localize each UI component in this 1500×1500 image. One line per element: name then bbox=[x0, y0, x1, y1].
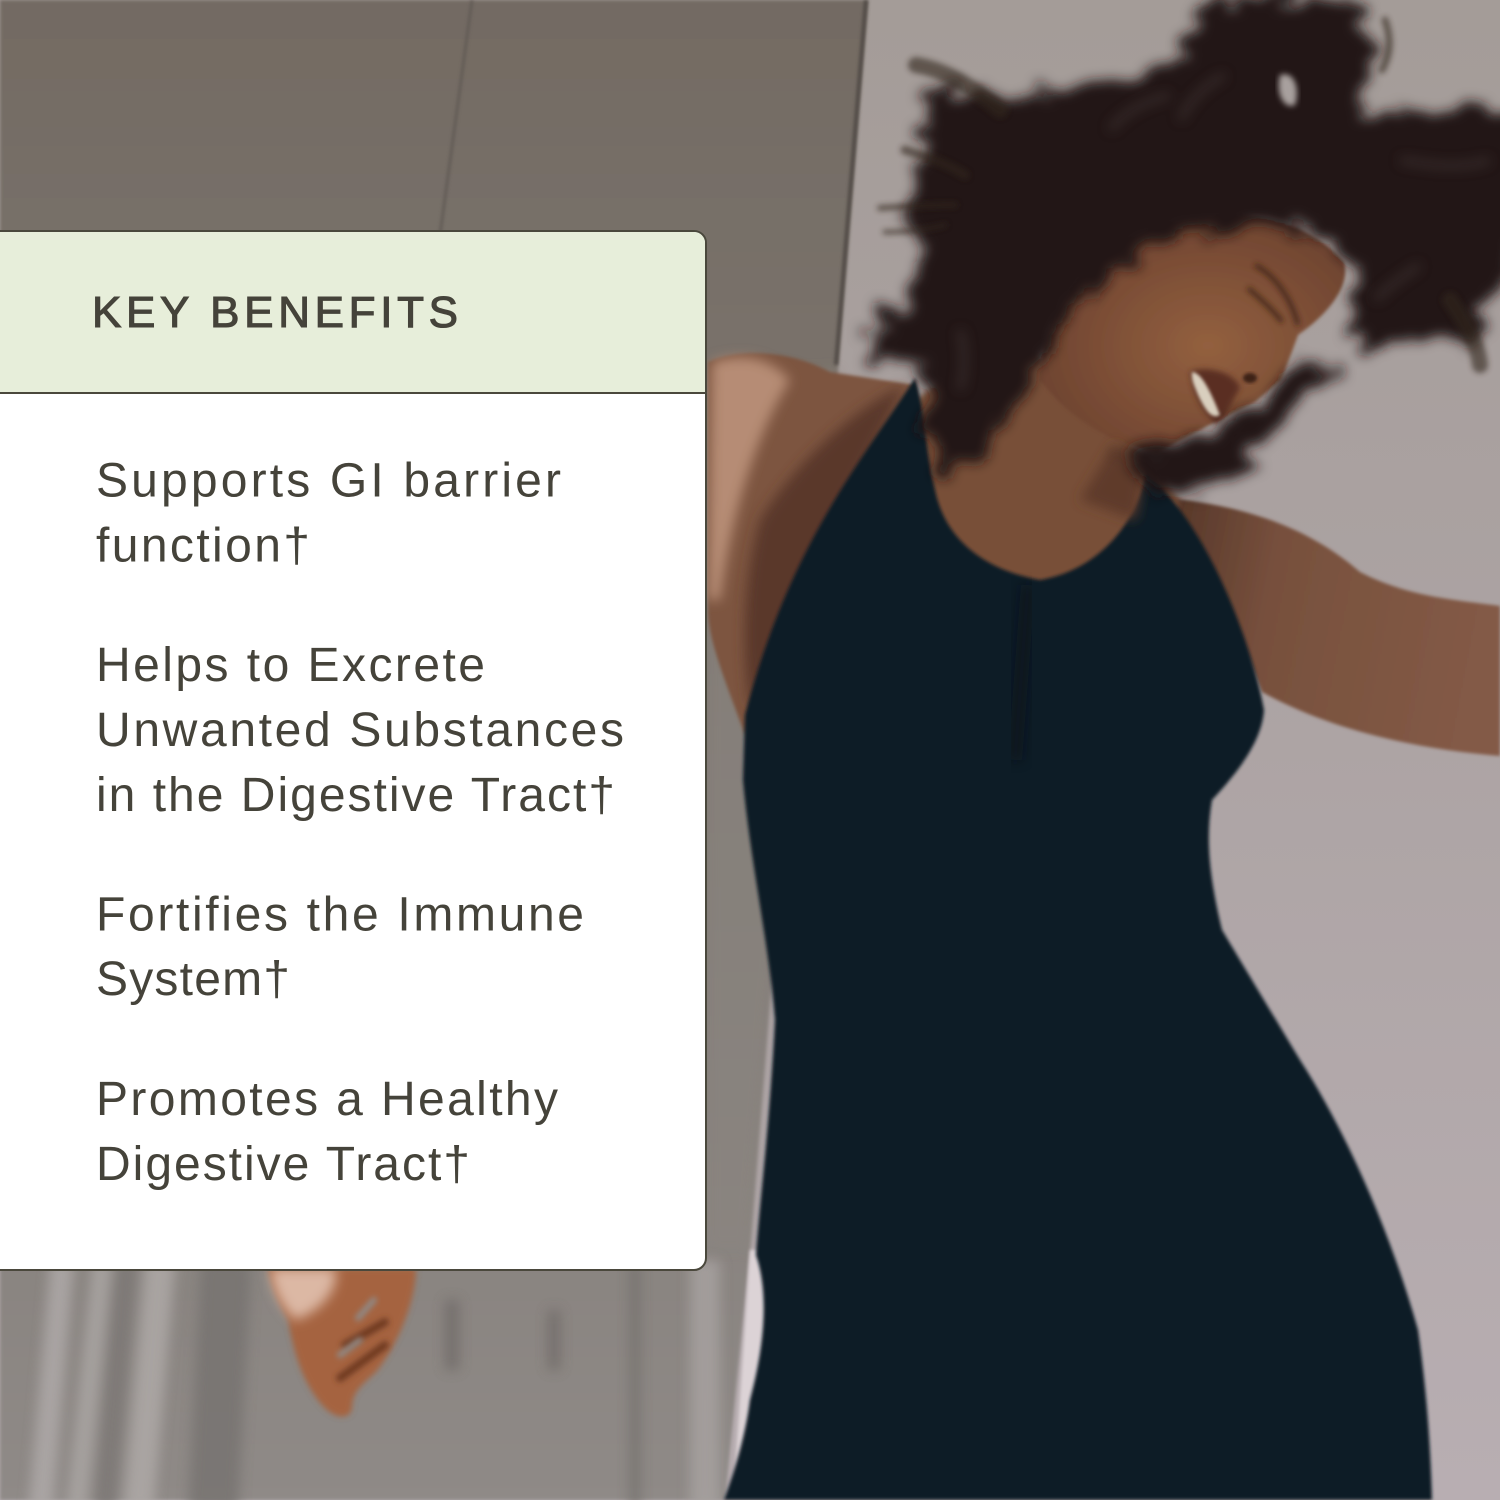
panel: key benefits card bbox=[0, 231, 706, 1270]
wall gap in hair curls bbox=[1279, 74, 1297, 106]
motion streaks below card bbox=[29, 1259, 720, 1500]
benefit 4 text bbox=[96, 1073, 558, 1191]
benefit 1 text: function† bbox=[96, 520, 310, 572]
benefit 3 text: Fortifies the Immune bbox=[96, 888, 584, 942]
pale wall strip beside dress bbox=[735, 1250, 772, 1470]
benefit 2 text: in the Digestive Tract† bbox=[96, 769, 615, 822]
concrete edge band beside card bbox=[706, 370, 838, 1250]
left shoulder and arm bbox=[708, 353, 930, 735]
benefit 1 text bbox=[96, 454, 561, 572]
photo: hand blurred at lower left bbox=[268, 1268, 416, 1417]
flying hair strands bbox=[880, 20, 1480, 365]
card header band bbox=[0, 232, 706, 393]
chest and neck bbox=[915, 330, 1180, 640]
benefit 4 text: Promotes a Healthy bbox=[96, 1073, 558, 1126]
benefit 2 text: Unwanted Substances bbox=[96, 704, 624, 757]
eye and brow bbox=[1248, 265, 1298, 325]
face bbox=[1040, 214, 1345, 453]
nose shadow bbox=[1243, 373, 1257, 383]
benefit 2 text bbox=[96, 639, 624, 822]
benefit 3 text bbox=[96, 888, 584, 1006]
right arm bbox=[1170, 498, 1500, 756]
dress zip shadow bbox=[1015, 585, 1028, 760]
photo: dancing woman bbox=[708, 0, 1500, 1500]
benefit 2 text: Helps to Excrete bbox=[96, 639, 485, 692]
hair highlights bbox=[960, 75, 1490, 390]
dress bbox=[724, 378, 1432, 1500]
smile bbox=[1190, 369, 1240, 424]
hair bbox=[862, 0, 1500, 495]
benefit 3 text: System† bbox=[96, 953, 290, 1006]
benefit 4 text: Digestive Tract† bbox=[96, 1138, 470, 1191]
heading: KEY BENEFITS bbox=[92, 288, 458, 337]
benefit 1 text: Supports GI barrier bbox=[96, 454, 561, 508]
neck shade bbox=[1080, 443, 1145, 520]
